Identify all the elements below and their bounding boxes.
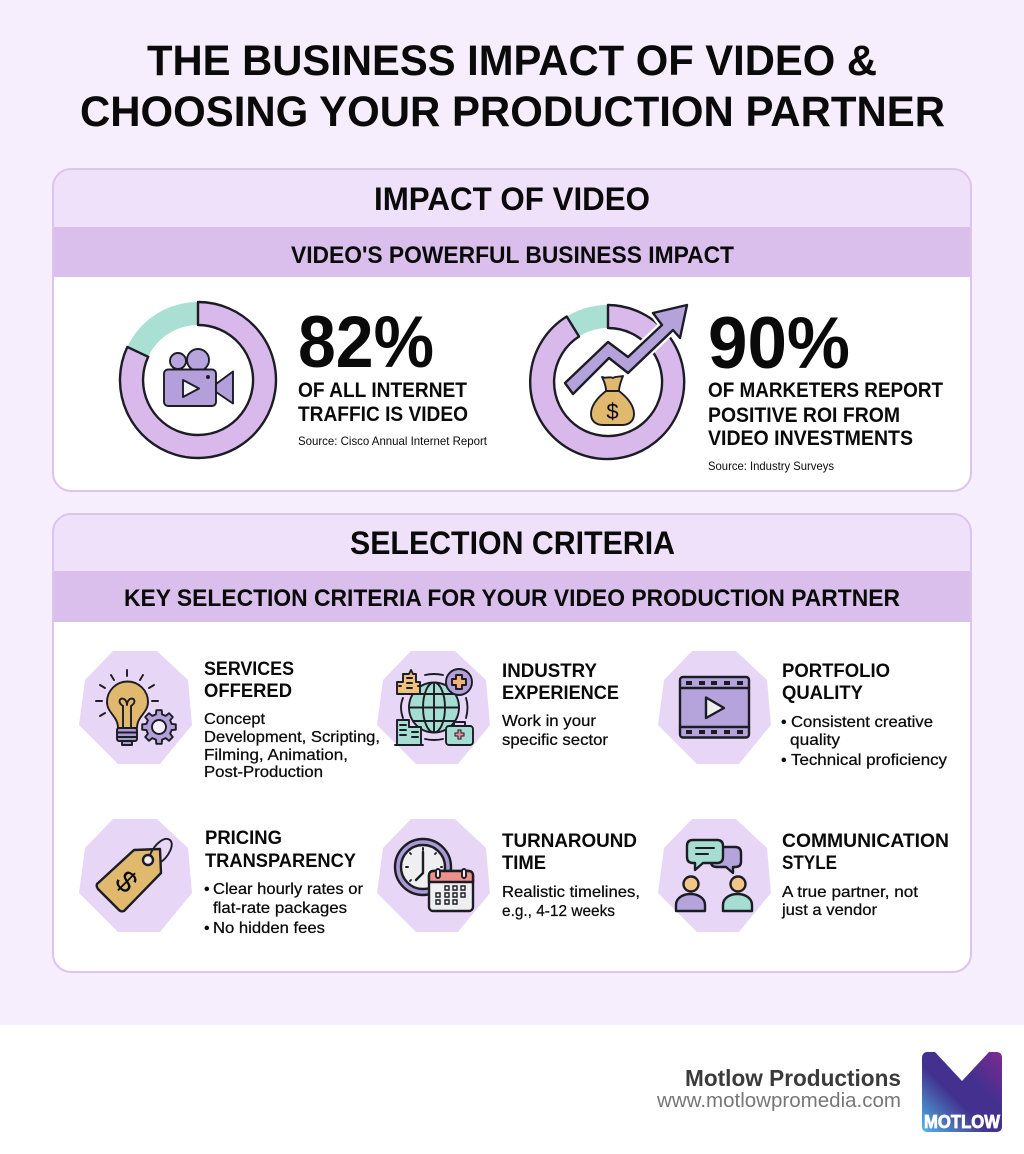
criterion: services offered <box>79 651 380 781</box>
logo: motlow <box>922 1052 1002 1132</box>
title <box>80 37 945 136</box>
text: services offered: Filming, Animation, <box>204 747 348 764</box>
text: industry experience: specific sector <box>502 732 609 749</box>
footer <box>0 1025 1024 1154</box>
text: portfolio quality: • <box>781 752 787 769</box>
text: portfolio quality <box>781 661 947 769</box>
criterion: pricing transparency <box>79 819 364 937</box>
text: portfolio quality: Technical proficiency <box>791 752 947 769</box>
icon: clock and calendar <box>377 819 490 932</box>
text: turnaround time: TURNAROUND <box>502 831 637 852</box>
panel: selection criteria <box>53 514 971 972</box>
icon: film strip with play button <box>658 651 771 764</box>
source: industry surveys: Source: Industry Surveys <box>708 459 834 473</box>
stat label: internet traffic: TRAFFIC IS VIDEO <box>298 403 468 426</box>
text: communication style: just a vendor <box>781 902 878 919</box>
text: services offered <box>204 659 380 781</box>
panel: impact of video <box>53 169 971 491</box>
heading: selection criteria: SELECTION CRITERIA <box>350 525 675 561</box>
text: portfolio quality: QUALITY <box>782 683 863 704</box>
text: pricing transparency: Clear hourly rates or <box>213 881 364 898</box>
logo: motlow: MOTLOW <box>924 1112 1000 1132</box>
title: THE BUSINESS IMPACT OF VIDEO & <box>147 37 877 85</box>
criterion: turnaround time <box>377 819 640 932</box>
footer url: www.motlowpromedia.com <box>656 1090 901 1112</box>
icon: two people talking <box>658 819 771 932</box>
icon: price tag <box>79 819 192 932</box>
text: pricing transparency: • <box>204 920 210 937</box>
text: pricing transparency: PRICING <box>205 828 282 849</box>
icon: light bulb and gear <box>79 651 192 764</box>
text: industry experience: EXPERIENCE <box>502 683 619 704</box>
text: portfolio quality: PORTFOLIO <box>782 661 890 682</box>
stat label: marketers roi: VIDEO INVESTMENTS <box>708 427 913 450</box>
text: communication style: COMMUNICATION <box>782 831 949 852</box>
text: pricing transparency: flat-rate packages <box>213 900 347 917</box>
stat label: marketers roi: OF MARKETERS REPORT <box>708 379 943 402</box>
subheading: key selection criteria: KEY SELECTION CRITERIA FOR YOUR VIDEO PRODUCTION PARTNER <box>124 585 900 612</box>
text: turnaround time: TIME <box>502 853 546 874</box>
donut chart: 82 percent <box>120 302 276 458</box>
text: portfolio quality: Consistent creative <box>791 714 933 731</box>
icon: price tag: $ <box>108 864 144 900</box>
icon: video camera <box>164 349 233 406</box>
stat: 82 percent: 82% <box>298 302 434 383</box>
icon: money bag <box>591 376 634 425</box>
stat: 90 percent: 90% <box>708 303 850 384</box>
text: services offered: OFFERED <box>204 681 292 702</box>
donut chart: 90 percent <box>530 305 684 459</box>
text: communication style <box>781 831 949 919</box>
text: portfolio quality: • <box>781 714 787 731</box>
criterion: communication style <box>658 819 949 932</box>
text: communication style: STYLE <box>782 853 837 874</box>
text: services offered: Post-Production <box>204 764 323 781</box>
heading: impact of video: IMPACT OF VIDEO <box>374 181 650 217</box>
icon: globe and buildings <box>377 651 490 764</box>
criterion: portfolio quality <box>658 651 947 769</box>
text: industry experience: INDUSTRY <box>502 661 597 682</box>
criterion: industry experience <box>377 651 619 764</box>
text: pricing transparency: • <box>204 881 210 898</box>
text: services offered: Development, Scripting, <box>204 729 380 746</box>
text: industry experience <box>502 661 619 749</box>
subheading: video's powerful business impact: VIDEO'S POWERFUL BUSINESS IMPACT <box>291 242 734 269</box>
text: turnaround time: e.g., 4-12 weeks <box>502 903 615 920</box>
title: CHOOSING YOUR PRODUCTION PARTNER <box>80 88 945 136</box>
icon: money bag: $ <box>606 399 619 424</box>
source: cisco: Source: Cisco Annual Internet Report <box>298 434 488 448</box>
text: pricing transparency <box>204 828 364 937</box>
arrow: growth <box>565 305 687 394</box>
text: industry experience: Work in your <box>502 713 597 730</box>
text: communication style: A true partner, not <box>782 884 919 901</box>
text: pricing transparency: TRANSPARENCY <box>205 851 356 872</box>
stat label: internet traffic: OF ALL INTERNET <box>298 379 467 402</box>
text: services offered: Concept <box>204 711 266 728</box>
footer brand name: Motlow Productions <box>685 1065 901 1091</box>
stat label: marketers roi: POSITIVE ROI FROM <box>708 404 900 427</box>
stat label: marketers roi <box>708 379 943 450</box>
text: services offered: SERVICES <box>204 659 294 680</box>
text: portfolio quality: quality <box>790 732 840 749</box>
stat label: internet traffic <box>298 379 468 426</box>
text: pricing transparency: No hidden fees <box>213 920 325 937</box>
text: turnaround time: Realistic timelines, <box>502 884 640 901</box>
text: turnaround time <box>502 831 640 920</box>
